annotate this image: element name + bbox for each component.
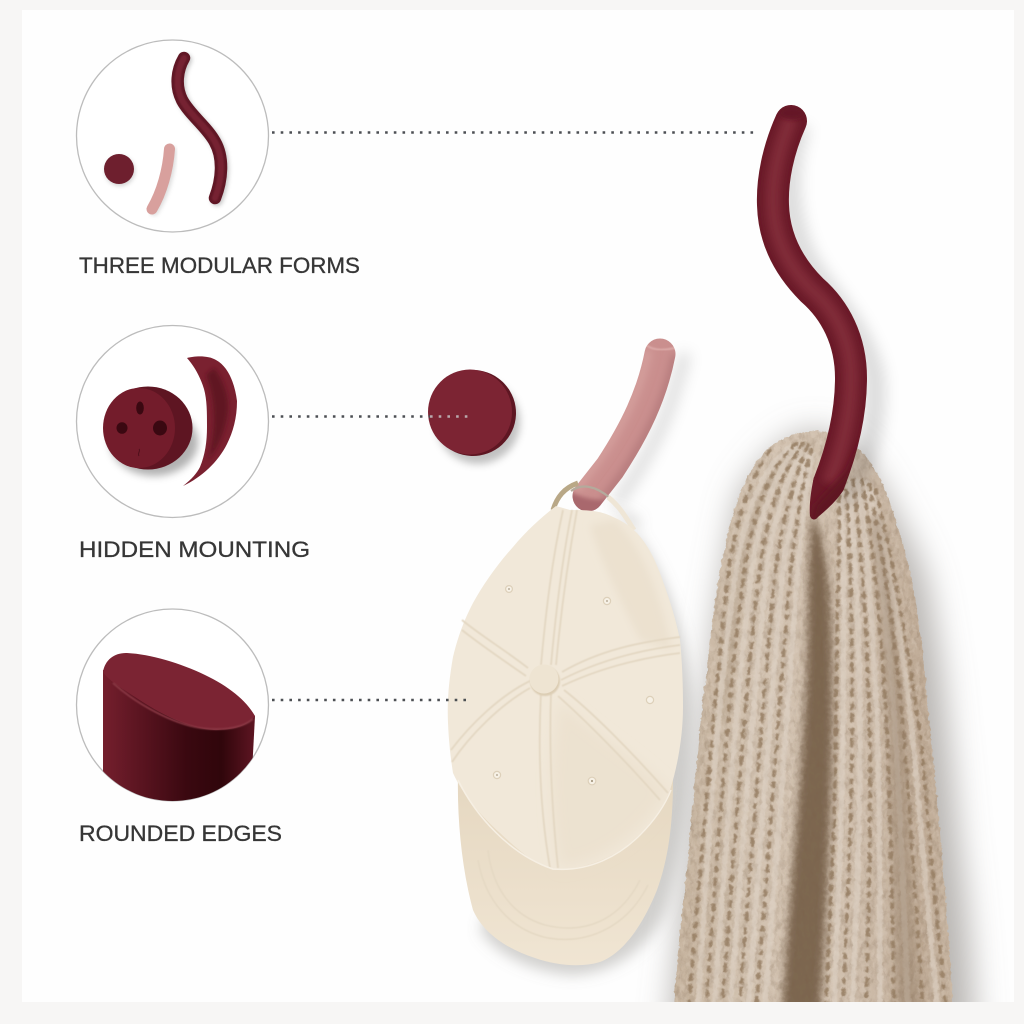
pink hook body <box>572 338 676 511</box>
big hook body <box>756 105 867 520</box>
crown lower shading <box>552 700 668 868</box>
scarf outer layer shading <box>722 450 800 717</box>
scarf inner fold shadow <box>782 515 832 1012</box>
panel: three modular forms <box>76 40 360 278</box>
knitted scarf <box>674 430 954 1002</box>
light knit ridges <box>698 444 938 1012</box>
crown button <box>530 664 560 696</box>
big hook shadow <box>790 125 875 500</box>
scarf shadow on wall <box>668 431 975 1024</box>
dark knit stitch columns <box>688 444 946 1012</box>
crown shading <box>590 520 672 650</box>
pink hook <box>572 338 692 511</box>
cap brim <box>458 775 673 965</box>
knit texture overlays <box>674 430 952 1002</box>
dotted connector: modular forms <box>272 131 757 134</box>
scarf right fold shadow <box>870 510 920 1012</box>
cap crown <box>448 506 683 870</box>
circle outline: modular forms <box>76 40 268 232</box>
disc side <box>418 358 528 468</box>
icon: curved hook piece <box>183 356 237 486</box>
crown eyelets <box>493 586 654 785</box>
disc shadow <box>436 380 520 464</box>
icon: round disc <box>104 154 135 186</box>
panel: rounded edges <box>76 609 282 846</box>
cap shadow on wall <box>480 500 692 975</box>
mounting disc on wall <box>418 358 528 468</box>
dotted connector: rounded edges <box>272 699 470 701</box>
scarf with shadow <box>660 425 975 1024</box>
icon: long S hook <box>178 58 223 200</box>
big burgundy hook <box>745 95 875 525</box>
cap strap loop <box>553 483 634 530</box>
crown front edge <box>458 780 671 869</box>
circle outline: hidden mounting <box>76 326 268 518</box>
brim stitching <box>478 850 648 939</box>
pink hook shadow <box>620 358 684 498</box>
baseball cap <box>448 483 683 965</box>
panel: hidden mounting <box>76 326 310 562</box>
label: three modular forms: THREE MODULAR FORMS <box>79 253 360 278</box>
crown seams <box>451 510 680 868</box>
icon: cylinder close-up <box>103 653 255 810</box>
dotted connector: hidden mounting <box>272 415 470 418</box>
icon: short pink hook <box>152 149 172 211</box>
icon: socket puck with screw holes <box>103 386 198 476</box>
eyelet centers <box>496 588 608 782</box>
label: rounded edges: ROUNDED EDGES <box>79 821 282 846</box>
label: hidden mounting: HIDDEN MOUNTING <box>79 537 310 562</box>
circle outline: rounded edges <box>76 609 268 801</box>
disc face <box>428 370 512 454</box>
